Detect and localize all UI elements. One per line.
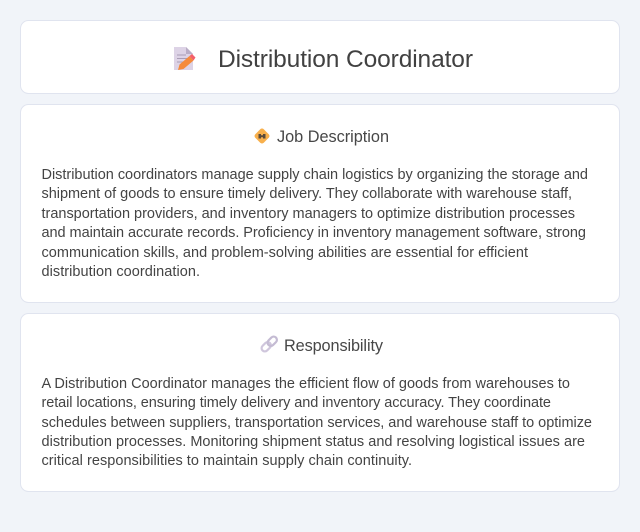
panel: job description	[20, 104, 620, 302]
text block: responsibility	[42, 376, 592, 469]
text block: job description: communication skills, and problem-solving abilities are essential for efficient	[42, 245, 528, 261]
heading: job description: Job Description	[277, 128, 389, 146]
text block: job description: shipment of goods to ensure timely delivery. They collaborate with warehouse staff,	[42, 186, 572, 202]
text block: responsibility: critical responsibilities to maintain supply chain continuity.	[42, 453, 412, 469]
title: Distribution Coordinator	[218, 46, 473, 73]
icon: orange diamond sign	[254, 128, 270, 144]
panel: responsibility	[20, 314, 620, 492]
text block: responsibility: A Distribution Coordinator manages the efficient flow of goods from warehouses to	[42, 376, 570, 392]
text block: job description: Distribution coordinators manage supply chain logistics by organizing the storage and	[42, 167, 588, 183]
text block: responsibility: retail locations, ensuring timely delivery and inventory accuracy. They coordinate	[42, 395, 551, 411]
text block: responsibility: distribution processes. Monitoring shipment status and resolving logistical issues are	[42, 434, 585, 450]
icon: chain link	[260, 335, 278, 353]
text block: responsibility: schedules between suppliers, transportation services, and warehouse staff to optimize	[42, 415, 592, 431]
text block: job description: transportation providers, and inventory managers to optimize distribution processes	[42, 206, 575, 222]
panel: title card	[20, 20, 620, 94]
icon: document with pencil	[174, 47, 196, 70]
text block: job description	[42, 167, 588, 280]
text block: job description: distribution coordination.	[42, 264, 200, 280]
heading: responsibility: Responsibility	[284, 337, 384, 355]
text block: job description: and maintain accurate records. Proficiency in inventory management software, strong	[42, 225, 586, 241]
